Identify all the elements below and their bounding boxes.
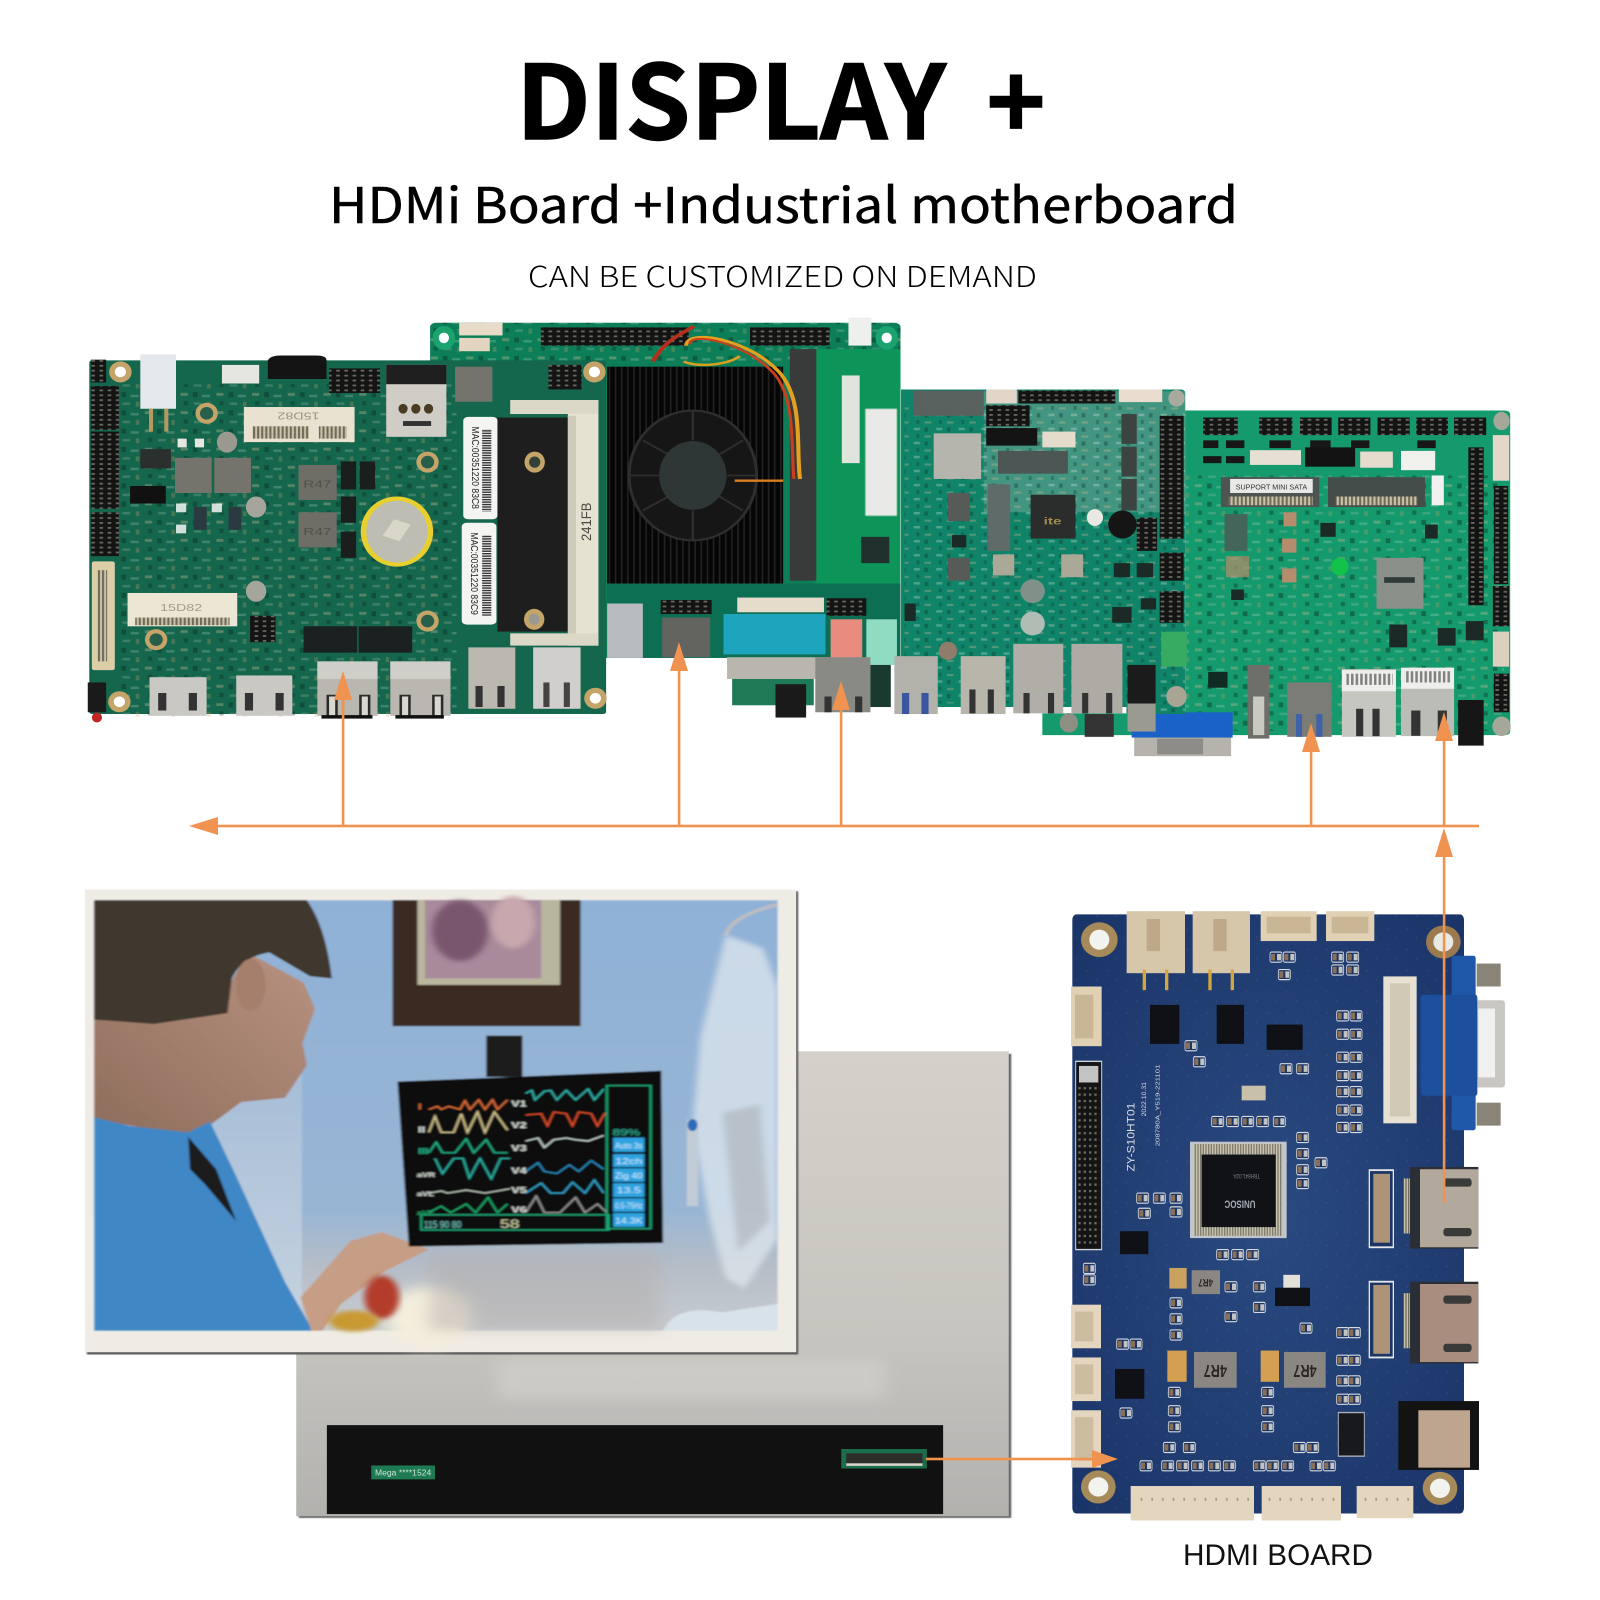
- patient monitor: V5: [511, 1186, 527, 1196]
- arrow: Ethernet port on board 1: [334, 671, 352, 826]
- patient monitor: 14.3K: [615, 1216, 643, 1226]
- power connectors: [1071, 911, 1374, 1046]
- black tape on panel: Mega ****1524: [375, 1469, 432, 1478]
- patient monitor: I: [418, 1102, 422, 1112]
- main chip: TBH841.02A: [1233, 1172, 1260, 1178]
- power inductors and capacitors: 4R7: [1293, 1360, 1317, 1380]
- patient monitor: 115 90 80: [424, 1218, 461, 1230]
- wall picture: [392, 896, 581, 1026]
- title: DISPLAY +: +: [986, 23, 1046, 168]
- arrow: port under audio jack: [832, 681, 850, 826]
- HDMI ports: [1369, 1167, 1478, 1363]
- arrow: port on board 2: [670, 642, 688, 826]
- black tape on panel: [327, 1425, 943, 1514]
- subtitle: HDMi Board +Industrial motherboard: [329, 167, 1238, 238]
- HDMI board: [1071, 911, 1505, 1520]
- patient monitor: II: [418, 1125, 425, 1135]
- connection arrows: [189, 642, 1479, 1468]
- DC jack: [1398, 1401, 1479, 1470]
- hospital room photo: [94, 896, 778, 1347]
- motherboard 3: middle board: [894, 389, 1187, 732]
- arrow: Ethernet port on board 4: [1435, 712, 1453, 826]
- power inductors and capacitors: 4R7: [1204, 1360, 1227, 1380]
- motherboard 1: front board: R47: [303, 478, 331, 490]
- VGA connector: [1421, 956, 1505, 1130]
- board labels: 2022.10.31: [1140, 1082, 1148, 1116]
- photo frame: nurse and patient monitor: [85, 890, 798, 1354]
- patient monitor: V1: [511, 1099, 527, 1109]
- title: DISPLAY +: DISPLAY: [516, 22, 947, 169]
- board labels: ZY-S10HT01: [1124, 1102, 1137, 1172]
- FPC connector: [841, 1449, 927, 1469]
- patient monitor: V2: [511, 1121, 527, 1130]
- 40-pin header: [1076, 1061, 1102, 1250]
- motherboard 4: right board: SUPPORT MINI SATA: [1236, 483, 1308, 491]
- motherboard 1: front board: 15D82: [160, 602, 202, 614]
- motherboard 4: right board: [1042, 411, 1511, 756]
- motherboard 1: front board: [88, 354, 607, 722]
- patient monitor: 13.5: [617, 1186, 641, 1196]
- IV bag: [663, 905, 778, 1331]
- patient monitor: aVR: [417, 1171, 435, 1179]
- LCD panel back (silver): [296, 1051, 1011, 1518]
- industrial motherboards group: [88, 318, 1511, 756]
- motherboard 1: front board: R47: [303, 525, 331, 537]
- bottom and side connectors: [1071, 1305, 1413, 1520]
- motherboard 1: front board: MAC:00351220 83C8: [470, 426, 481, 509]
- small components: [1083, 952, 1364, 1471]
- patient monitor: 0.5-75Hz: [615, 1201, 642, 1211]
- motherboard 1: front board: 15D82: [277, 410, 320, 421]
- patient monitor: 58: [500, 1218, 519, 1231]
- arrow: USB port on board 4: [1302, 723, 1320, 826]
- display assembly: [85, 890, 1011, 1518]
- patient monitor: 89%: [612, 1127, 641, 1138]
- motherboard 1: front board: MAC:00351220 83C9: [469, 532, 480, 615]
- patient monitor: Zig 40: [615, 1171, 643, 1181]
- patient monitor: aVL: [417, 1190, 434, 1198]
- bus arrow: [189, 817, 1479, 835]
- power inductors and capacitors: 4R7: [1198, 1276, 1213, 1288]
- main chip: UNISOC: [1224, 1197, 1256, 1210]
- white side connector: [1383, 976, 1417, 1123]
- patient monitor: III: [418, 1147, 429, 1156]
- board labels: 208780A_Y519-221101: [1155, 1064, 1161, 1146]
- main chip: [1190, 1142, 1287, 1238]
- arrow: display to HDMI board: [926, 1450, 1118, 1468]
- patient monitor: 12ch: [615, 1157, 642, 1166]
- patient monitor: V6: [511, 1205, 527, 1215]
- arrow: HDMI output up to bus: [1435, 828, 1453, 1203]
- patient monitor: aVF: [417, 1209, 434, 1216]
- motherboard 3: middle board: ite: [1044, 515, 1061, 527]
- mounting holes: [1081, 922, 1461, 1505]
- board labels: [1124, 1064, 1161, 1172]
- motherboard 2: heatsink board: [430, 318, 901, 718]
- tagline: CAN BE CUSTOMIZED ON DEMAND: [528, 255, 1037, 296]
- patient monitor: V3: [511, 1144, 527, 1153]
- motherboard 1: front board: 241FB: [578, 502, 594, 541]
- power inductors and capacitors: [1167, 1268, 1326, 1388]
- label: HDMI BOARD: HDMI BOARD: [1183, 1539, 1373, 1572]
- patient monitor: V4: [511, 1166, 527, 1176]
- nurse: [94, 900, 429, 1331]
- patient monitor: Auto 3s: [615, 1141, 642, 1151]
- patient monitor: [398, 1036, 663, 1246]
